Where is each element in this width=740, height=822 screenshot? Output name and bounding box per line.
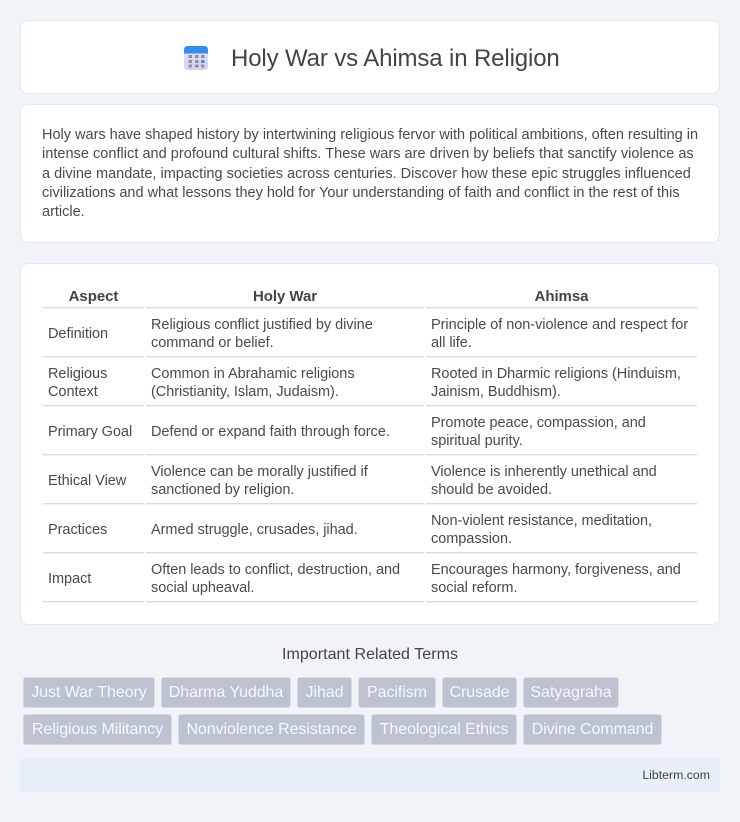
table header: Holy War (253, 288, 317, 305)
row: practices (48, 513, 652, 547)
row: ethical view: should be avoided. (431, 482, 552, 498)
comparison table panel (20, 263, 720, 625)
table header: Ahimsa (535, 288, 588, 305)
row: ethical view (48, 464, 657, 498)
intro panel: a divine mandate, impacting societies across centuries. Discover how these epic struggles influenced (42, 166, 691, 182)
row: practices: Practices (48, 522, 107, 538)
related term tags: Nonviolence Resistance (186, 721, 357, 738)
related term tags: Jihad (306, 684, 343, 701)
row: ethical view: Violence can be morally justified if (151, 464, 368, 480)
related term tags: Just War Theory (31, 684, 147, 701)
row: impact: social reform. (431, 580, 517, 596)
related term tags: Religious Militancy (32, 721, 163, 738)
row: primary goal: Promote peace, compassion, and (431, 415, 646, 431)
row: practices: Non-violent resistance, meditation, (431, 513, 652, 529)
row: practices: Armed struggle, crusades, jihad. (151, 522, 358, 538)
related term tags: Dharma Yuddha (169, 684, 283, 701)
intro panel: civilizations and what lessons they hold for Your understanding of faith and conflict in the rest of this (42, 185, 680, 201)
table header (69, 288, 589, 305)
related term tags (23, 677, 662, 745)
row: religious context: Jainism, Buddhism). (431, 384, 561, 400)
related terms heading: Important Related Terms (282, 646, 458, 663)
row: ethical view: Violence is inherently unethical and (431, 464, 657, 480)
row: religious context: Religious (48, 366, 107, 382)
comparison table (43, 288, 697, 603)
row: impact: Encourages harmony, forgiveness, and (431, 562, 681, 578)
footer (20, 758, 720, 792)
table header: Aspect (69, 288, 118, 305)
row: definition: command or belief. (151, 335, 274, 351)
intro panel (20, 104, 720, 243)
row: impact (48, 562, 681, 596)
related term tags: Pacifism (367, 684, 427, 701)
row: impact: Often leads to conflict, destruction, and (151, 562, 400, 578)
icon: calendar (184, 46, 208, 70)
row: practices: compassion. (431, 531, 512, 547)
row: definition: Religious conflict justified by divine (151, 317, 373, 333)
row: religious context: Context (48, 384, 98, 400)
intro panel: Holy wars have shaped history by intertwining religious fervor with political ambitions, often resulting in (42, 127, 698, 143)
row: impact: Impact (48, 571, 91, 587)
header card (20, 20, 720, 94)
row: religious context: Rooted in Dharmic religions (Hinduism, (431, 366, 681, 382)
intro panel: intense conflict and profound cultural shifts. These wars are driven by beliefs that sanctify violence as (42, 146, 694, 162)
row: primary goal (48, 415, 646, 449)
related term tags: Theological Ethics (380, 721, 508, 738)
related term tags: Divine Command (532, 721, 653, 738)
row: ethical view: sanctioned by religion. (151, 482, 294, 498)
related term tags: Satyagraha (530, 684, 612, 701)
row: impact: social upheaval. (151, 580, 254, 596)
intro panel: article. (42, 204, 85, 220)
row: religious context: (Christianity, Islam, Judaism). (151, 384, 339, 400)
row: primary goal: spiritual purity. (431, 433, 523, 449)
row: definition (48, 317, 688, 351)
row: religious context: Common in Abrahamic religions (151, 366, 355, 382)
row: primary goal: Defend or expand faith through force. (151, 424, 390, 440)
row: definition: all life. (431, 335, 472, 351)
row: ethical view: Ethical View (48, 473, 126, 489)
related term tags: Crusade (450, 684, 510, 701)
row: definition: Definition (48, 326, 108, 342)
footer credit: Libterm.com (642, 768, 710, 782)
row: definition: Principle of non-violence and respect for (431, 317, 688, 333)
title: Holy War vs Ahimsa in Religion (231, 45, 560, 72)
row: primary goal: Primary Goal (48, 424, 132, 440)
row: religious context (48, 366, 681, 400)
